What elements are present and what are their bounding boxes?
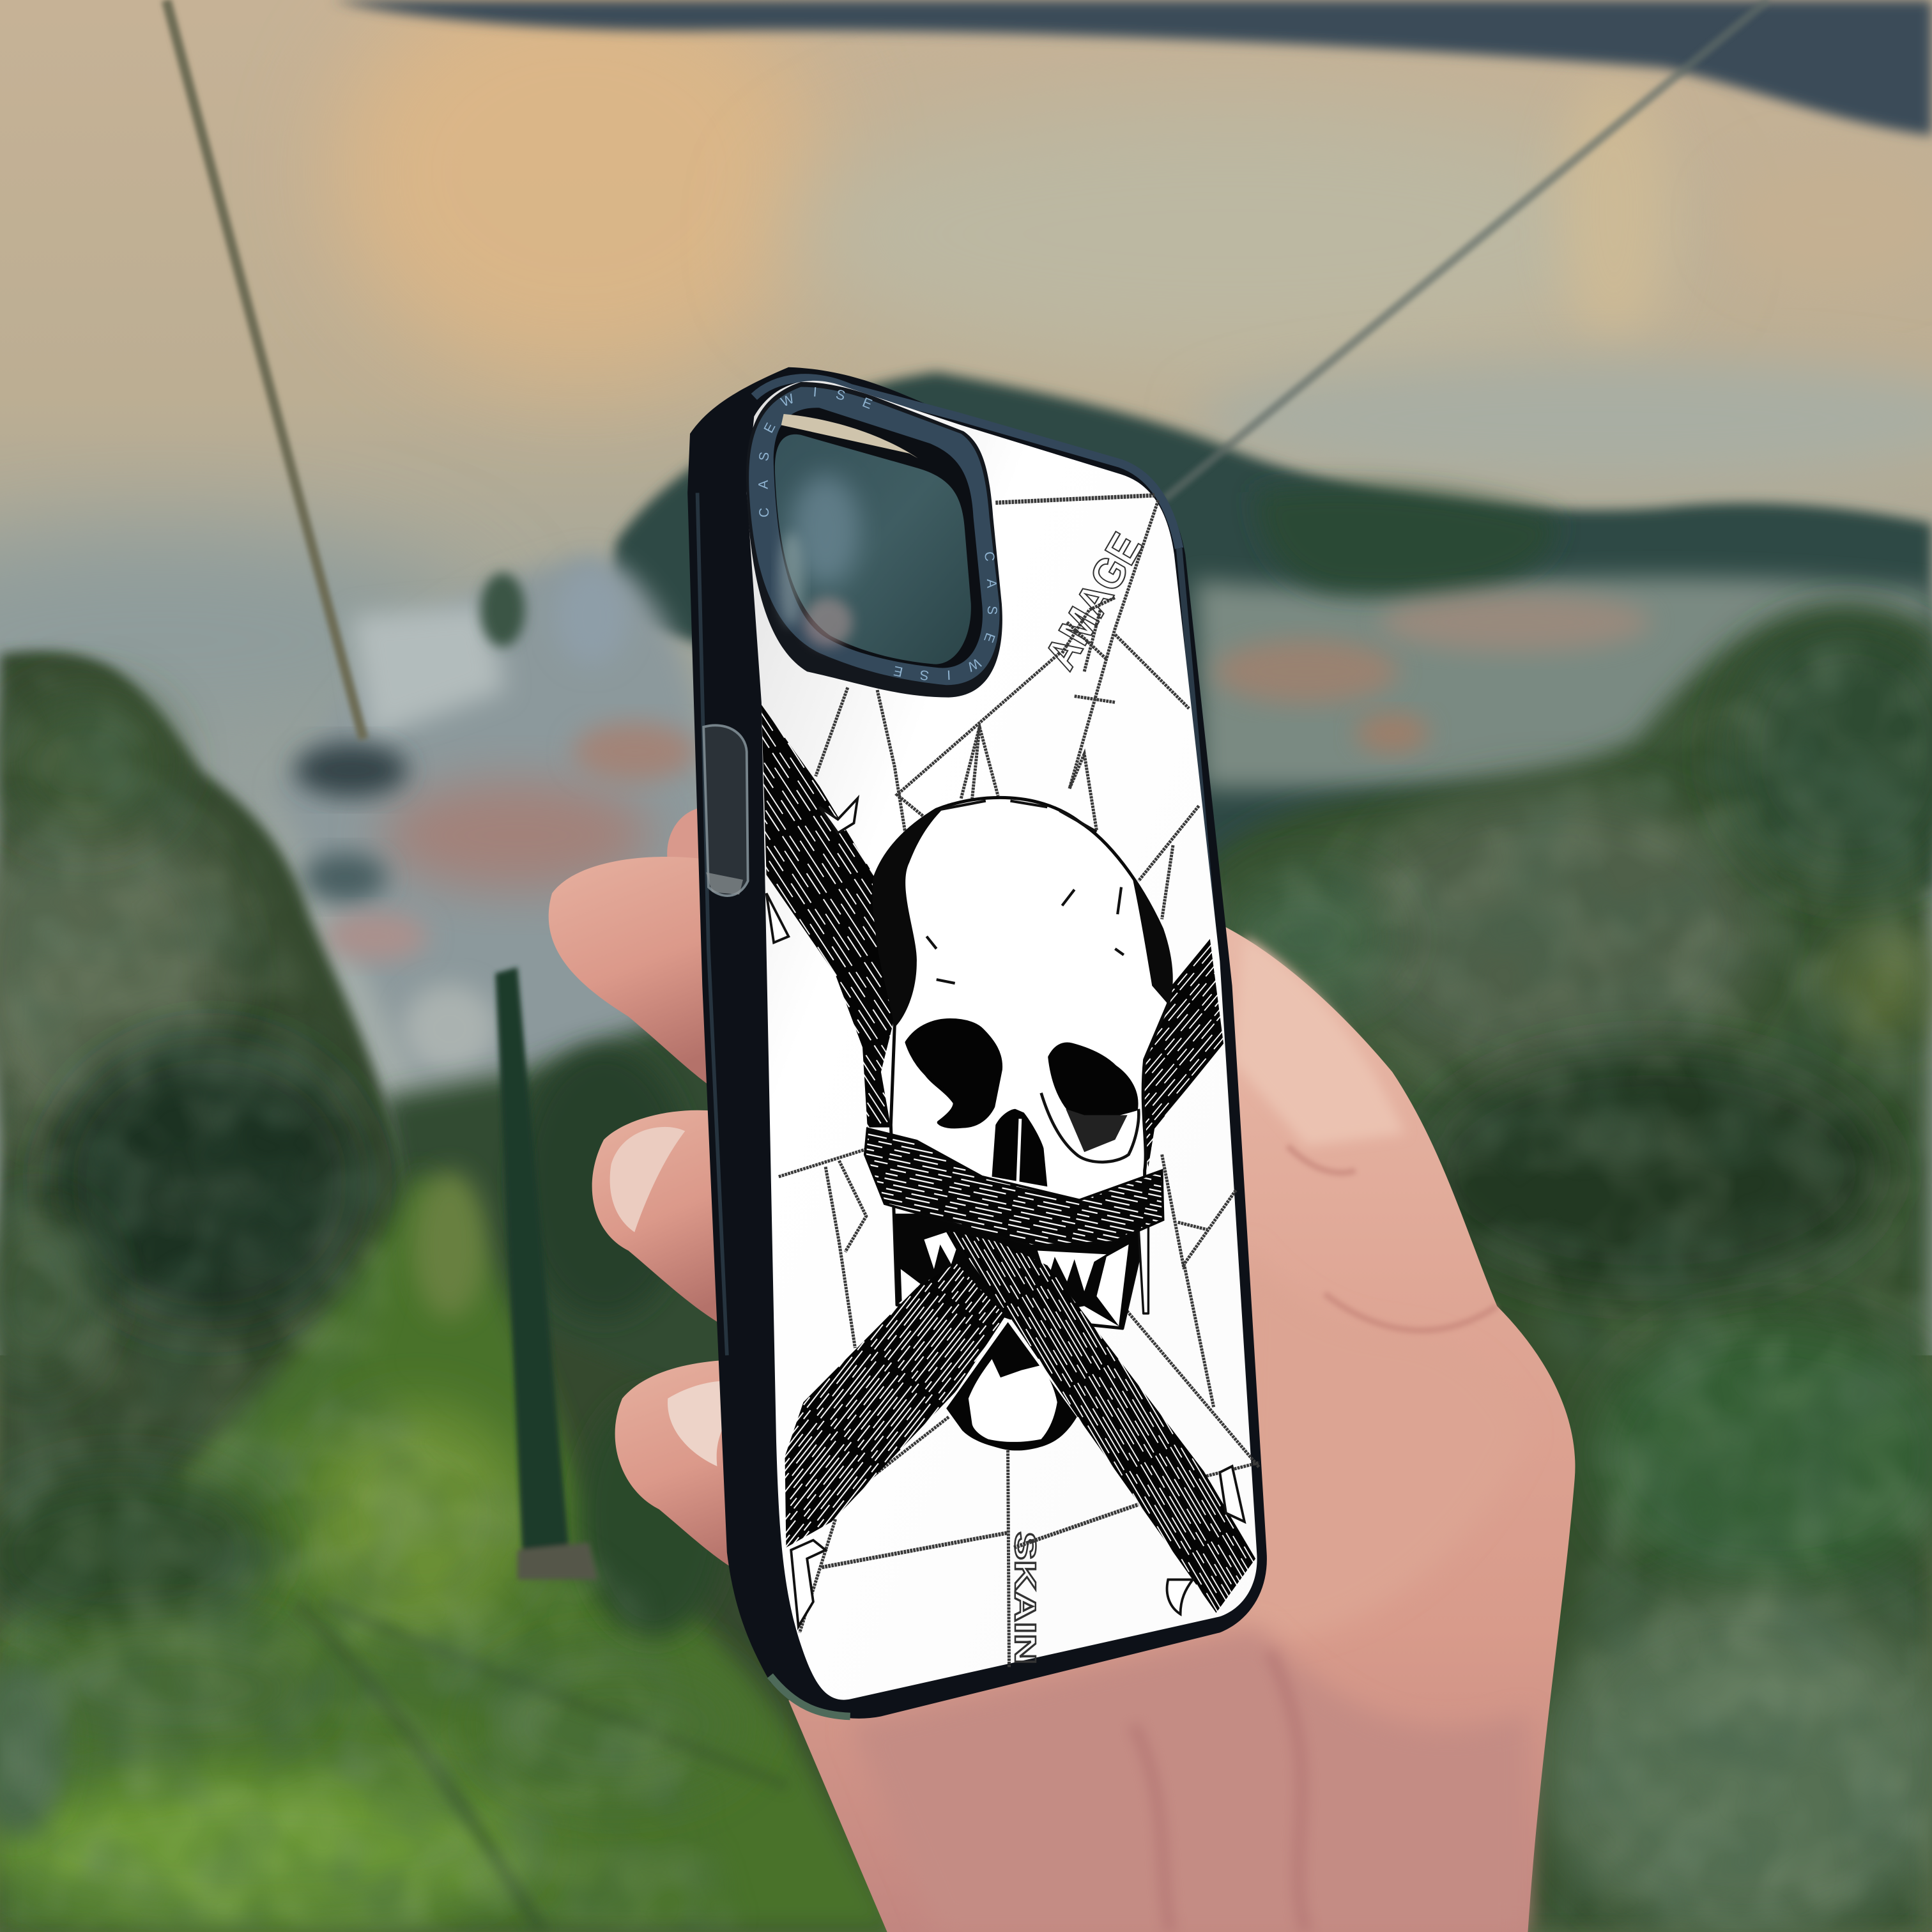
camera ring: blue grey bezel bbox=[749, 387, 1000, 685]
artwork: gag band over mouth bbox=[865, 1129, 1163, 1246]
peninsula hill and town bbox=[277, 372, 1932, 1084]
finger: ring with nail bbox=[615, 1360, 801, 1583]
hand behind phone: palm and thumb bbox=[788, 924, 1575, 1932]
artwork: crossed bones lower right bbox=[949, 1231, 1255, 1614]
artwork: hand-drawn web lines bbox=[779, 495, 1259, 1667]
finger: little finger top bbox=[667, 806, 739, 889]
artwork: skull chin between bones bbox=[946, 1322, 1077, 1450]
lift pylon bbox=[495, 967, 597, 1579]
foliage texture bbox=[1, 643, 1931, 1929]
artwork: crossed bones upper right bbox=[1132, 939, 1223, 1167]
phone case body bbox=[687, 367, 1267, 1719]
nose cavity bbox=[992, 1109, 1047, 1186]
cable left bbox=[166, 0, 364, 739]
camera ring: shadow rim bbox=[746, 382, 1002, 698]
side buttons bbox=[703, 725, 748, 896]
artwork: skull bbox=[873, 797, 1171, 1328]
cable right bbox=[1164, 0, 1768, 499]
open jaw bbox=[894, 1214, 1145, 1328]
camera ring: CASEWISE lettering top: CASEWISE bbox=[758, 387, 873, 517]
far shore bbox=[333, 0, 1932, 135]
camera lens: black inner rim bbox=[774, 408, 983, 668]
background: lake and sunset bbox=[0, 0, 1932, 1355]
eye socket right bbox=[1050, 1044, 1137, 1120]
foreground trees and slope left bbox=[0, 651, 900, 1932]
camera lens: glass bbox=[775, 414, 971, 664]
finger: index bbox=[549, 857, 727, 1096]
phone case back: white artwork panel bbox=[747, 381, 1257, 1700]
foreground trees right bbox=[1208, 608, 1932, 1932]
valley trees behind fingers bbox=[382, 986, 788, 1540]
artwork: scribbled word top right: AMAGE bbox=[1034, 525, 1152, 678]
camera ring: CASEWISE lettering bottom: CASEWISE bbox=[893, 552, 997, 680]
eye socket left bbox=[907, 1020, 1000, 1126]
artwork: scribbled word bottom: SKAIN bbox=[1009, 1531, 1042, 1665]
finger: middle with nail bbox=[592, 1110, 746, 1337]
artwork: crossed bones lower left bbox=[785, 1263, 1006, 1627]
artwork: crossed bones upper left bbox=[762, 705, 906, 1128]
